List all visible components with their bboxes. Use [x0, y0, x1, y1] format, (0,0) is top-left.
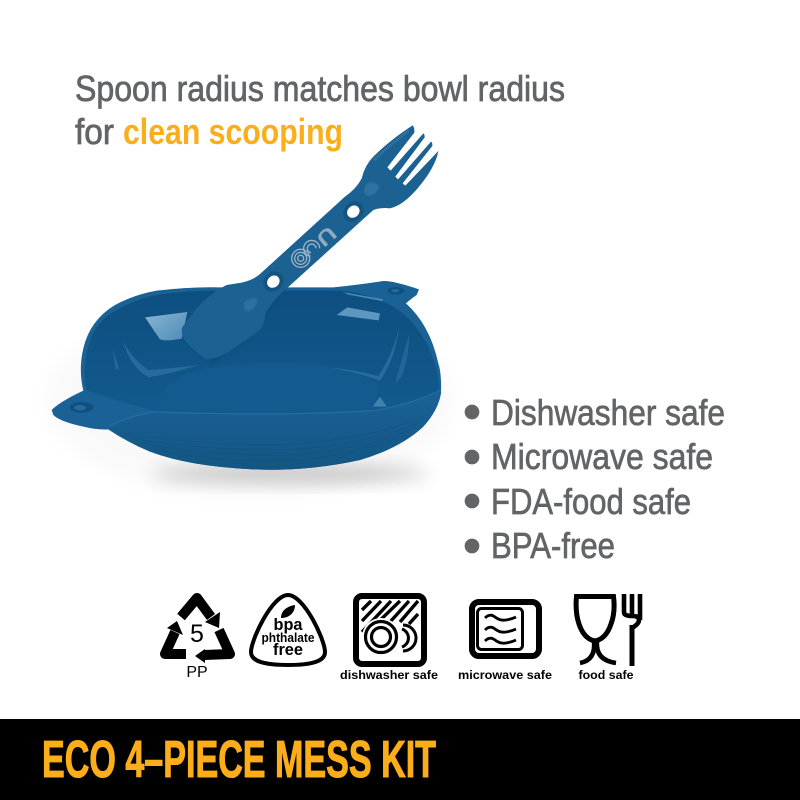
- icon: dishwasher safe: [340, 596, 438, 682]
- spork lower hole: [259, 267, 288, 296]
- bullet: BPA free: BPA-free: [491, 525, 615, 566]
- bowl floor: [155, 363, 380, 413]
- icon: food safe: food safe: [578, 670, 634, 682]
- product photo: blue bowl and spork: [45, 125, 455, 500]
- bullet: microwave safe: Microwave safe: [491, 436, 713, 477]
- heading: spoon radius headline: [75, 68, 565, 152]
- footer band: [0, 719, 800, 800]
- icon: bpa phthalate free: free: [273, 640, 303, 659]
- logo: UCO: U: [312, 222, 341, 251]
- icon: microwave safe: [458, 602, 552, 682]
- bowl right handle recess: [387, 287, 405, 294]
- heading: spoon radius headline: Spoon radius matches bowl radius: [75, 68, 565, 109]
- feature list: [465, 392, 725, 566]
- icon: bpa phthalate free: phthalate: [262, 630, 314, 645]
- bullet: FDA food safe: FDA-food safe: [491, 481, 691, 522]
- bullet: dishwasher safe: Dishwasher safe: [491, 392, 725, 433]
- bowl shadow: [45, 300, 455, 500]
- spork: [182, 125, 438, 359]
- icon: recycling 5 PP: [165, 598, 230, 681]
- icon: microwave safe: microwave safe: [458, 670, 552, 682]
- heading: spoon radius headline: clean scooping: [123, 111, 343, 152]
- spork fork highlight: [364, 182, 379, 196]
- bowl interior crease left: [123, 342, 198, 377]
- bowl front wall: [108, 392, 441, 470]
- bowl interior crease right: [330, 327, 399, 381]
- logo: UCO: [292, 222, 341, 267]
- spork fork edge serration: [373, 131, 408, 161]
- bowl interior: [85, 291, 439, 414]
- icon: bpa phthalate free: [251, 595, 325, 665]
- icon: recycling 5 PP: PP: [186, 664, 208, 681]
- spoon shadow on bowl: [183, 290, 280, 363]
- bowl front ridges: [125, 417, 423, 461]
- footer title: ECO 4–PIECE MESS KIT: [42, 731, 436, 789]
- icon: food safe: [576, 594, 640, 682]
- bowl rim highlight: [108, 390, 441, 426]
- icon: bpa phthalate free: bpa: [274, 616, 303, 634]
- bowl left handle recess: [70, 402, 94, 413]
- bowl glare: [145, 312, 187, 340]
- icon: dishwasher safe: dishwasher safe: [340, 670, 438, 682]
- bowl: [52, 281, 441, 470]
- spork upper hole: [339, 197, 368, 226]
- heading: spoon radius headline: for: [75, 111, 114, 152]
- spork spoon highlight: [244, 298, 257, 312]
- icon: recycling 5 PP: 5: [190, 620, 204, 648]
